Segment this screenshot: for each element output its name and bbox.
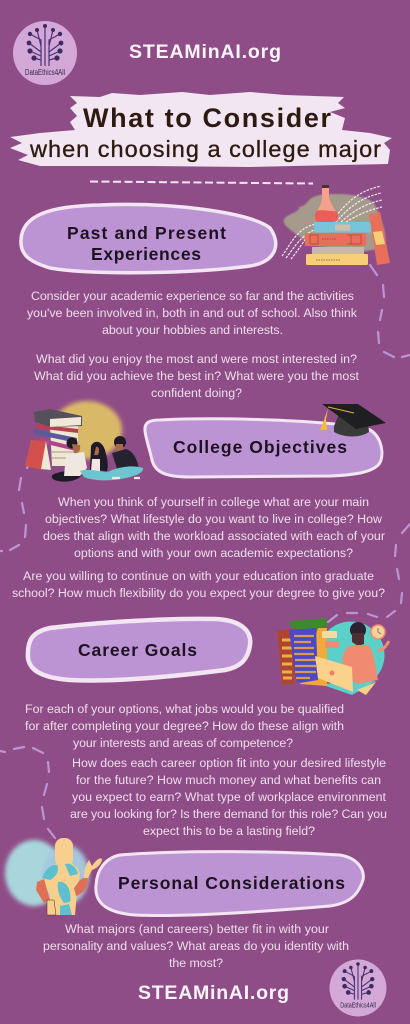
text block: past and present 1: Consider your academic experience so far and the activities [31,289,354,303]
text block: career goals 2: you expect to earn? What type of workplace environment [72,790,387,804]
text block: career goals 2: are you looking for? Is there demand for this role? Can you [70,807,387,821]
icon: graduation cap [320,404,386,436]
text block: career goals 2 [70,756,387,838]
text block: past and present 1: about your hobbies and interests. [102,323,283,337]
title line 2: when choosing a college major [29,136,381,162]
icon: career illustration [277,618,389,695]
text block: career goals 1 [25,702,344,750]
text block: past and present 2: What did you achieve the best in? What were you the most [34,369,360,383]
text block: college objectives 1: objectives? What lifestyle do you want to live in college? How [45,512,382,526]
text block: college objectives 1: options and with your own academic expectations? [74,546,353,560]
text block: college objectives 2: Are you willing to continue on with your education into graduate [23,569,374,583]
text block: personal considerations: What majors (and careers) better fit in with your [65,922,329,936]
title banner [10,92,392,167]
connector: dashes left lower [0,747,55,838]
text block: past and present 2: confident doing? [151,386,242,400]
text block: college objectives 1: When you think of yourself in college what are your main [58,495,369,509]
icon: books and flask [282,185,390,265]
site name bottom: STEAMinAI.org [138,982,289,1004]
text block: career goals 2: expect this to be a lasting field? [143,824,315,838]
panel: college objectives heading: College Objectives [173,437,347,457]
panel: personal considerations heading: Personal Considerations [118,873,345,893]
panel: past and present experiences heading: Experiences [91,244,201,264]
text block: college objectives 2: school? How much flexibility do you expect your degree to give you? [12,586,385,600]
text block: career goals 2: How does each career option fit into your desired lifestyle [72,756,386,770]
panel: past and present experiences heading: Past and Present [67,223,226,243]
connector: dashes left [0,465,29,551]
panel: career goals heading [28,619,250,680]
logo: DataEthics4All bottom [330,960,386,1016]
text block: personal considerations [43,922,349,970]
text block: career goals 2: for the future? How much money and what benefits can [76,773,381,787]
text block: career goals 1: For each of your options, what jobs would you be qualified [25,702,344,716]
icon: students and books [25,401,143,482]
panel: college objectives heading [145,419,382,477]
panel: past and present experiences heading [21,204,276,273]
icon: person with cloud [5,838,102,915]
text block: college objectives 1 [43,495,385,560]
text block: past and present 1: you've been involved in, both in and out of school. Also think [27,306,358,320]
text block: past and present 2 [34,352,360,400]
panel: career goals heading: Career Goals [78,640,197,660]
text block: past and present 2: What did you enjoy the most and were most interested in? [36,352,357,366]
connector: dashes right upper [370,265,410,357]
title line 1: What to Consider [83,103,331,133]
brush stroke background [10,92,392,167]
site name top: STEAMinAI.org [129,41,281,63]
text block: past and present 1 [27,289,358,337]
text block: career goals 1: your interests and areas of competence? [73,736,293,750]
dashed divider [90,182,313,184]
text block: college objectives 2 [12,569,385,600]
text block: college objectives 1: does that align with the workload associated with each of your [43,529,385,543]
logo: DataEthics4All top [13,21,77,85]
text block: personal considerations: the most? [169,956,223,970]
logo: DataEthics4All bottom: DataEthics4All [340,1002,376,1010]
text block: personal considerations: personality and values? What areas do you identity with [43,939,349,953]
text block: career goals 1: for after completing your degree? How do these align with [25,719,344,733]
logo: DataEthics4All top: DataEthics4All [25,68,65,77]
connector: dashes right middle [328,524,410,622]
panel: personal considerations heading [96,852,363,915]
